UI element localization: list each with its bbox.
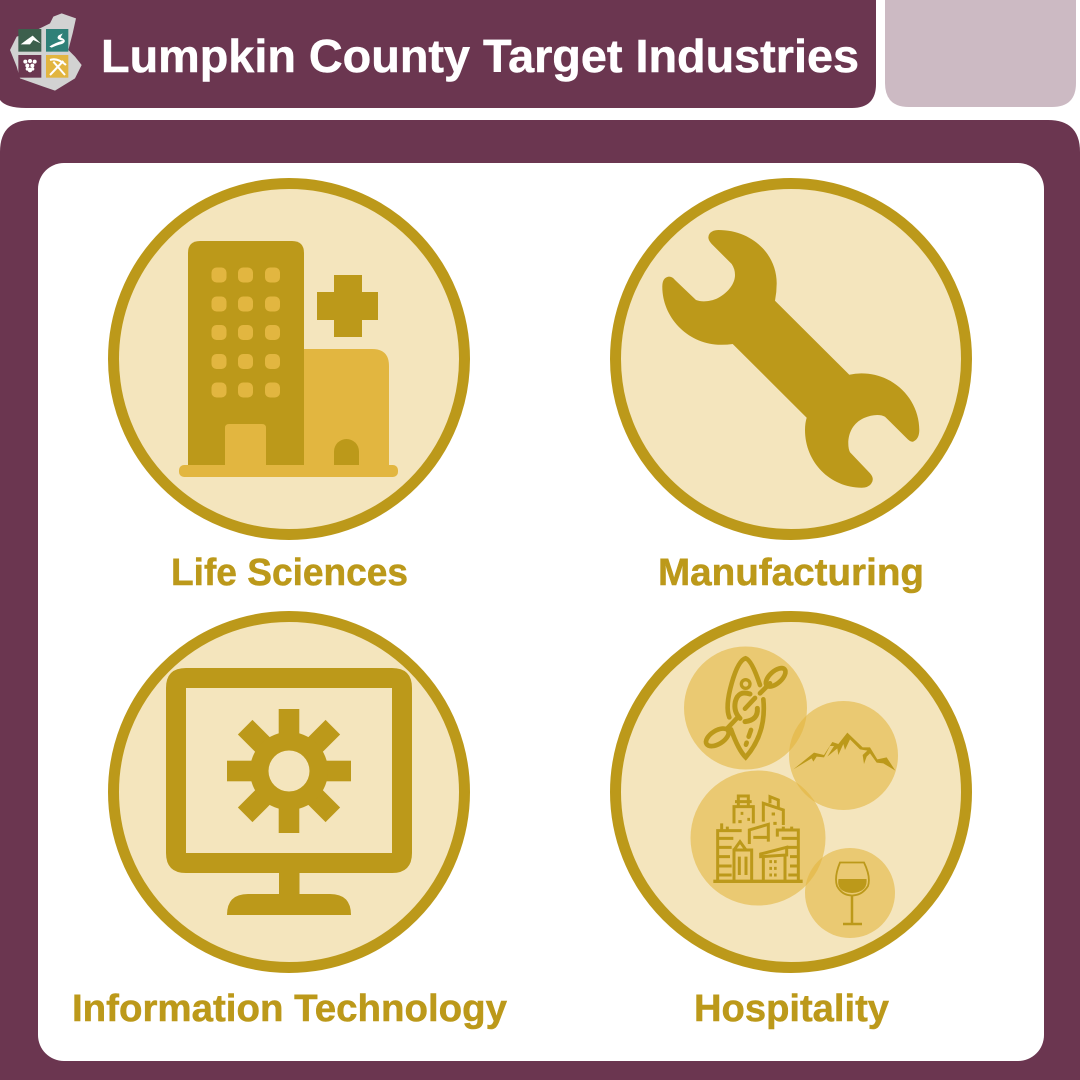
- label: Life Sciences: Life Sciences: [171, 552, 408, 594]
- panel: Manufacturing: [616, 184, 966, 594]
- icon: kayak badge: [684, 646, 807, 770]
- icon: wine badge: [805, 848, 895, 938]
- panel: Hospitality: [616, 616, 966, 1030]
- label: Manufacturing: Manufacturing: [658, 552, 924, 594]
- icon circle: hospitality: [616, 616, 966, 968]
- inner white panel: [38, 163, 1044, 1061]
- icon: monitor with gear: [166, 668, 412, 915]
- icon: mountain badge: [789, 701, 898, 810]
- icon: wrench: [662, 230, 919, 488]
- icon circle: life sciences: [114, 184, 464, 534]
- header accent box: [885, 0, 1076, 107]
- icon circle: information technology: [114, 616, 464, 968]
- label: Hospitality: Hospitality: [694, 988, 889, 1030]
- panel: Life Sciences: [114, 184, 464, 594]
- panel: Information Technology: [72, 616, 507, 1030]
- icon circle: manufacturing: [616, 184, 966, 534]
- title: Lumpkin County Target Industries: [101, 30, 859, 82]
- logo: Lumpkin County map with four tiles: [10, 13, 82, 91]
- label: Information Technology: Information Technology: [72, 988, 507, 1030]
- icon: city badge: [690, 770, 826, 906]
- icon: hospital building: [179, 241, 398, 477]
- header banner: [0, 0, 876, 108]
